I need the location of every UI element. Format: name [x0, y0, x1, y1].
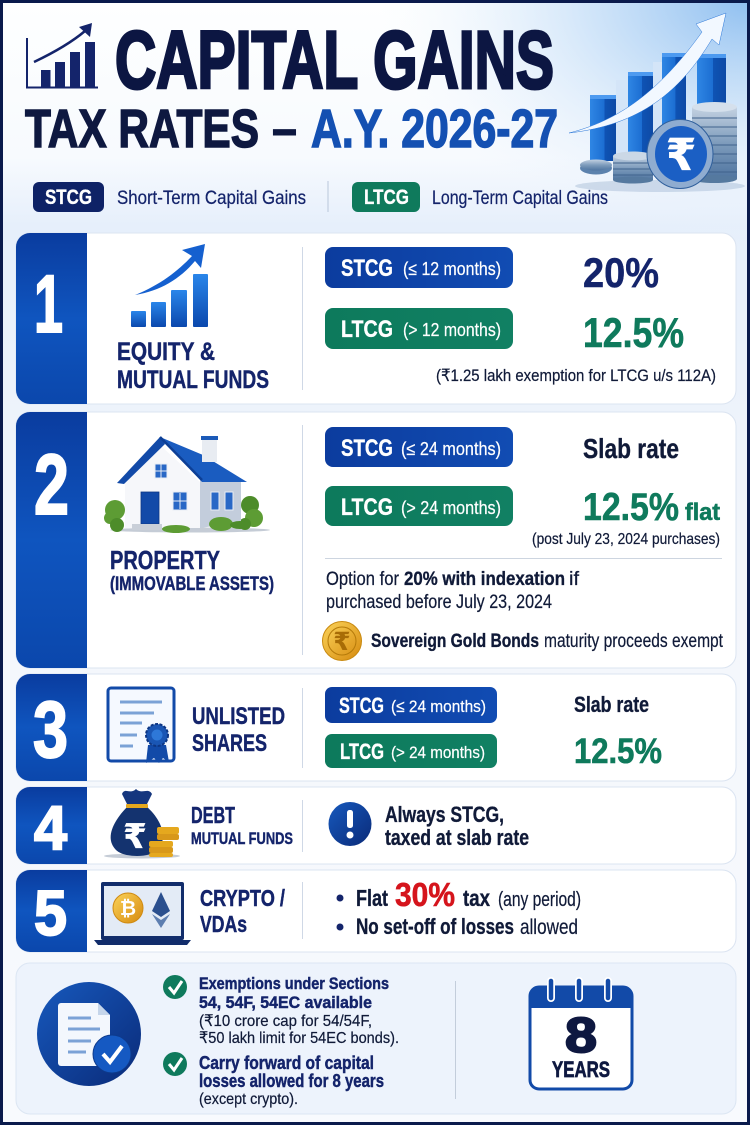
panel: exemptions and carry forward — [16, 963, 736, 1114]
icon: calendar 8 years — [530, 981, 632, 1089]
number 5: 5 — [34, 877, 67, 949]
heading: property — [110, 545, 274, 595]
carry forward check item: (except crypto). — [199, 1091, 298, 1108]
rate: 12.5% flat: flat — [685, 499, 720, 526]
carry forward check item — [163, 1052, 384, 1108]
chip: STCG 24 months: (≤ 24 months) — [391, 697, 486, 716]
chip: STCG 12 months: (≤ 12 months) — [403, 259, 501, 279]
icon: gold coin — [322, 622, 362, 660]
number 4: 4 — [34, 794, 67, 863]
icon: calendar 8 years: YEARS — [552, 1057, 610, 1082]
icon: certificate — [108, 688, 174, 763]
chip: STCG 24 months: (≤ 24 months) — [401, 439, 501, 459]
exemption check item: (₹10 crore cap for 54/54F, — [199, 1013, 372, 1030]
chip: LTCG 24 months — [325, 734, 497, 768]
number 2: 2 — [34, 438, 69, 533]
legend: STCG — [33, 182, 306, 212]
heading: unlisted shares: UNLISTED — [192, 703, 285, 730]
legend: LTCG — [352, 182, 608, 212]
chip: LTCG 24 months: (> 24 months) — [391, 743, 485, 762]
rate: slab: Slab rate — [583, 433, 679, 464]
indexation option text: if — [569, 569, 580, 590]
heading: unlisted shares — [192, 703, 285, 757]
panel 4: debt mutual funds — [16, 787, 736, 864]
title line 2: – — [272, 99, 297, 159]
chip: LTCG 24 months — [325, 486, 513, 526]
crypto bullet 1 — [336, 876, 581, 913]
crypto bullet 1: 30% — [395, 876, 455, 913]
chip: STCG 24 months — [325, 687, 497, 723]
heading: crypto vdas: CRYPTO / — [200, 885, 285, 911]
panel 3: unlisted shares — [16, 674, 736, 781]
icon: rising bars — [131, 244, 208, 327]
exemption check item: ₹50 lakh limit for 54EC bonds). — [199, 1030, 399, 1047]
sovereign gold bonds note — [371, 631, 724, 652]
chip: LTCG 12 months — [325, 308, 513, 349]
crypto bullet 2: allowed — [520, 916, 578, 939]
chip: STCG 12 months: STCG — [341, 255, 393, 282]
chip: LTCG 24 months: LTCG — [341, 494, 393, 521]
indexation option text: Option for — [326, 569, 400, 590]
icon: exclamation — [328, 802, 372, 846]
number 3: 3 — [33, 685, 68, 774]
exemption note: (₹1.25 lakh exemption for LTCG u/s 112A) — [436, 366, 716, 385]
panel 5: crypto — [16, 870, 736, 952]
heading: equity and mutual funds: EQUITY & — [117, 338, 215, 366]
indexation option text: 20% with indexation — [404, 569, 565, 590]
panel 1: equity and mutual funds — [16, 233, 736, 404]
icon: document with check — [37, 982, 141, 1086]
debt fund treatment text: taxed at slab rate — [385, 825, 529, 850]
heading: unlisted shares: SHARES — [192, 730, 267, 757]
crypto bullet 1: tax — [463, 885, 490, 911]
exemption check item: 54, 54F, 54EC available — [199, 993, 372, 1012]
heading: crypto vdas — [200, 885, 285, 937]
crypto bullet 2: No set-off of losses — [356, 914, 514, 939]
chip: LTCG 24 months: (> 24 months) — [401, 498, 501, 518]
heading: debt mutual funds — [191, 802, 293, 848]
heading: property: PROPERTY — [110, 545, 220, 575]
chip: STCG 24 months — [325, 427, 513, 467]
title line 2: TAX RATES — [25, 99, 259, 159]
sovereign gold bonds note: Sovereign Gold Bonds — [371, 631, 539, 652]
chip: LTCG 12 months: (> 12 months) — [403, 320, 501, 340]
crypto bullet 1: Flat — [356, 885, 388, 911]
heading: property: (IMMOVABLE ASSETS) — [110, 574, 274, 595]
indexation option text: purchased before July 23, 2024 — [326, 592, 552, 613]
rate: 12.5% flat: 12.5% — [583, 486, 679, 529]
icon: calendar 8 years: 8 — [565, 1009, 597, 1063]
chip: STCG 12 months — [325, 247, 513, 288]
crypto bullet 1: (any period) — [498, 889, 581, 911]
icon: house — [104, 436, 270, 533]
heading: equity and mutual funds: MUTUAL FUNDS — [117, 366, 269, 394]
icon: money bag — [104, 789, 180, 858]
rate: slab: Slab rate — [574, 692, 649, 717]
chip: STCG 24 months: STCG — [339, 693, 384, 718]
purchase date note: (post July 23, 2024 purchases) — [532, 531, 720, 548]
rate 20%: 20% — [583, 249, 659, 296]
carry forward check item: losses allowed for 8 years — [199, 1071, 384, 1091]
legend: STCG: STCG — [45, 186, 92, 209]
title line 2: A.Y. 2026-27 — [311, 99, 558, 159]
number 1: 1 — [34, 259, 63, 350]
heading: crypto vdas: VDAs — [200, 911, 247, 937]
legend: LTCG: LTCG — [364, 186, 409, 209]
hero illustration: bars, coins and arrow: ₹ — [666, 131, 696, 180]
heading: debt mutual funds: DEBT — [191, 802, 235, 828]
chip: LTCG 12 months: LTCG — [341, 316, 393, 343]
carry forward check item: Carry forward of capital — [199, 1053, 374, 1073]
rate 12.5%: 12.5% — [583, 309, 684, 356]
icon: laptop: ₿ — [120, 898, 136, 920]
debt fund treatment text: Always STCG, — [385, 802, 504, 827]
heading: debt mutual funds: MUTUAL FUNDS — [191, 829, 293, 848]
chip: STCG 24 months: STCG — [341, 435, 393, 462]
icon: laptop — [94, 882, 191, 945]
indexation option text — [326, 569, 580, 613]
rate: 12.5%: 12.5% — [574, 732, 662, 771]
icon: title bar chart — [27, 23, 98, 88]
hero illustration: bars, coins and arrow — [569, 13, 745, 192]
legend: LTCG: Long-Term Capital Gains — [432, 188, 608, 209]
heading: equity and mutual funds — [117, 338, 269, 394]
legend: STCG: Short-Term Capital Gains — [117, 188, 306, 209]
exemption check item: Exemptions under Sections — [199, 974, 389, 993]
icon: money bag: ₹ — [123, 818, 147, 856]
debt fund treatment text — [385, 802, 529, 850]
icon: gold coin: ₹ — [333, 628, 351, 656]
chip: LTCG 24 months: LTCG — [340, 739, 384, 764]
exemption check item — [163, 974, 399, 1047]
title line 2 — [25, 99, 558, 159]
panel 2: property — [16, 412, 736, 668]
title line 1: CAPITAL GAINS — [115, 15, 554, 106]
